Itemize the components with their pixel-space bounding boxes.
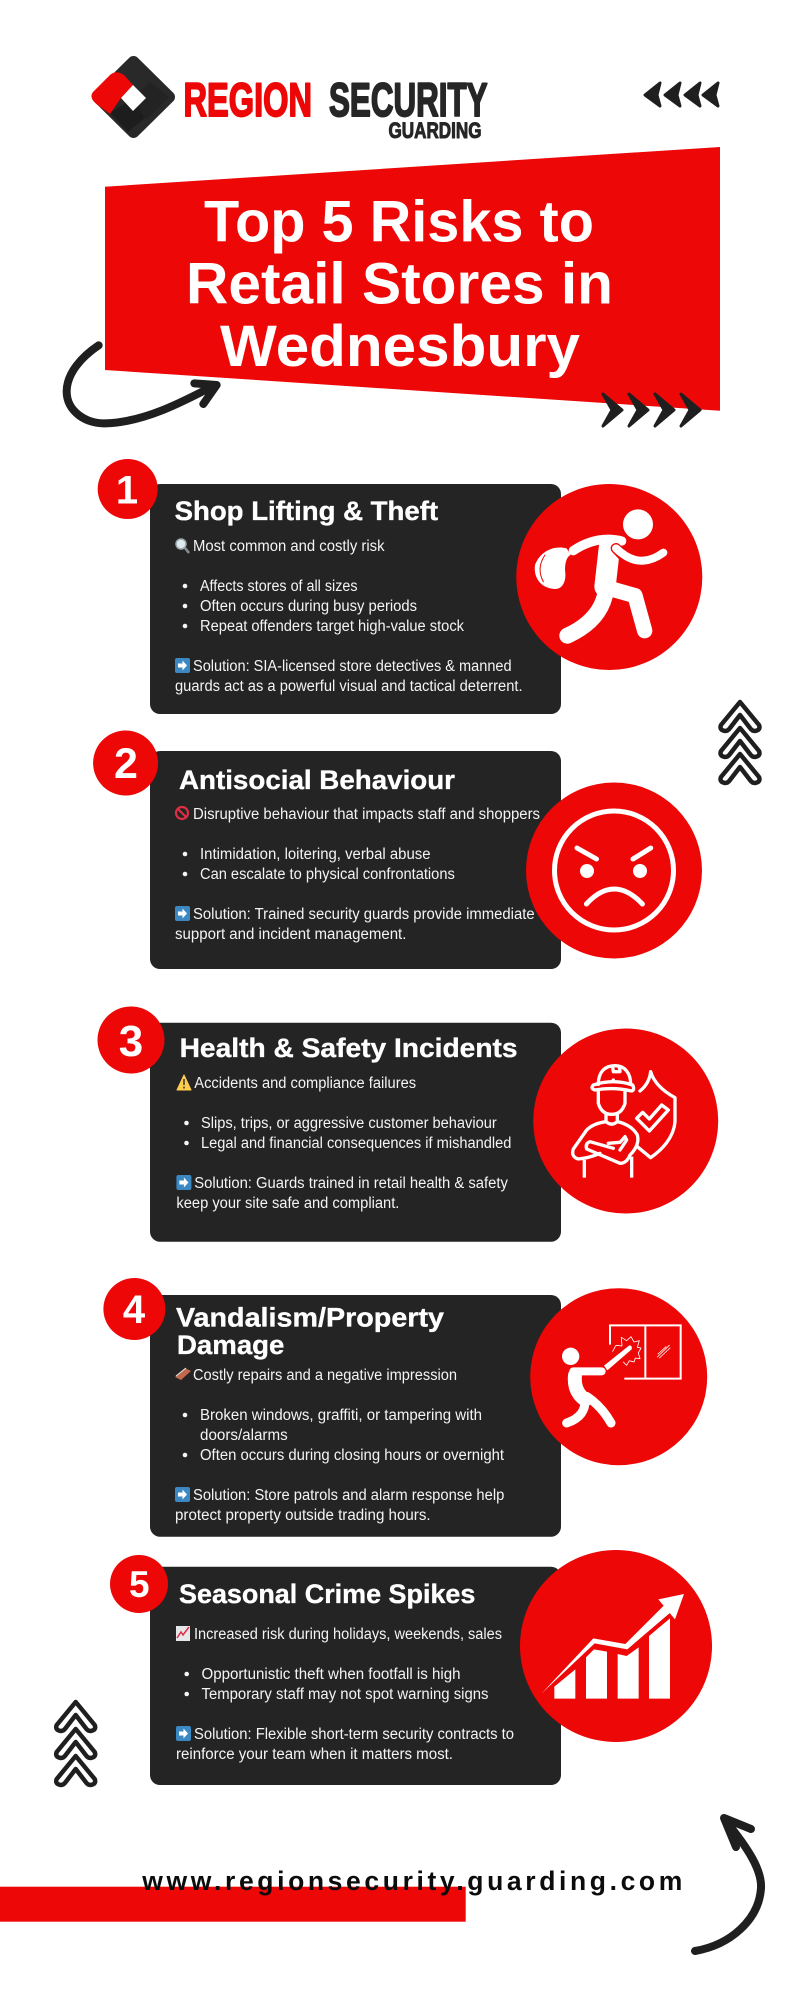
number badge 1 bbox=[98, 459, 158, 519]
up chevrons left bbox=[56, 1702, 95, 1785]
number badge 4 bbox=[103, 1278, 165, 1340]
number badge 5: 5 bbox=[129, 1564, 150, 1605]
body text: Most common and costly risk bbox=[193, 538, 385, 555]
heading: Shop Lifting & Theft bbox=[175, 496, 438, 526]
curved arrow bottom-right bbox=[695, 1818, 761, 1951]
banner shape bbox=[105, 147, 720, 411]
main title: Wednesbury bbox=[220, 314, 580, 379]
heading: Antisocial Behaviour bbox=[179, 765, 455, 795]
body text: Solution: SIA-licensed store detectives & manned bbox=[193, 658, 512, 675]
card background bbox=[150, 1567, 561, 1785]
card background bbox=[150, 484, 561, 714]
body text: Can escalate to physical confrontations bbox=[200, 866, 455, 883]
body text: Solution: Trained security guards provide immediate bbox=[193, 906, 535, 923]
panel: risk 4 bbox=[103, 1278, 707, 1537]
body text: Solution: Flexible short-term security contracts to bbox=[194, 1726, 514, 1743]
heading: Damage bbox=[177, 1330, 284, 1360]
body text: Solution: Guards trained in retail health & safety bbox=[194, 1175, 508, 1192]
logo bbox=[91, 62, 488, 143]
up chevrons right bbox=[720, 702, 760, 783]
number badge 3 bbox=[98, 1006, 164, 1074]
heading bbox=[176, 1303, 444, 1360]
body text bbox=[175, 538, 523, 695]
illustration circle: safety guard and shield bbox=[533, 1028, 718, 1214]
heading: Health & Safety Incidents bbox=[180, 1033, 518, 1063]
illustration circle: rising chart bbox=[520, 1550, 712, 1742]
number badge 4: 4 bbox=[123, 1288, 146, 1332]
logo mark bbox=[91, 62, 169, 132]
body text: Legal and financial consequences if mishandled bbox=[201, 1135, 511, 1152]
body text: guards act as a powerful visual and tactical deterrent. bbox=[175, 678, 523, 695]
panel: risk 1 bbox=[98, 459, 702, 714]
body text bbox=[176, 1075, 511, 1212]
body text: Disruptive behaviour that impacts staff and shoppers bbox=[193, 806, 540, 823]
body text: Affects stores of all sizes bbox=[200, 578, 358, 595]
panel: risk 2 bbox=[93, 730, 702, 969]
body text: Often occurs during closing hours or overnight bbox=[200, 1447, 505, 1464]
illustration circle: thief running bbox=[516, 484, 702, 670]
main title bbox=[186, 190, 613, 379]
logo wordmark: SECURITY bbox=[329, 73, 488, 126]
panel: risk 3 bbox=[98, 1006, 718, 1242]
number badge 2 bbox=[93, 730, 158, 796]
body text: Intimidation, loitering, verbal abuse bbox=[200, 846, 430, 863]
panel: risk 5 bbox=[110, 1550, 712, 1785]
body text: Slips, trips, or aggressive customer behaviour bbox=[201, 1115, 497, 1132]
body text: Repeat offenders target high-value stock bbox=[200, 618, 464, 635]
number badge 3: 3 bbox=[119, 1017, 143, 1066]
illustration circle: vandal breaking window bbox=[530, 1288, 707, 1465]
left-pointing chevrons bbox=[645, 83, 718, 106]
body text: Increased risk during holidays, weekends, sales bbox=[194, 1626, 502, 1643]
body text: Accidents and compliance failures bbox=[194, 1075, 416, 1092]
body text: Opportunistic theft when footfall is high bbox=[202, 1666, 460, 1683]
card background bbox=[150, 1295, 561, 1537]
body text: Costly repairs and a negative impression bbox=[193, 1367, 457, 1384]
main title: Top 5 Risks to bbox=[204, 190, 594, 255]
body text: protect property outside trading hours. bbox=[175, 1507, 431, 1524]
logo wordmark: GUARDING bbox=[388, 118, 482, 143]
number badge 5 bbox=[110, 1555, 168, 1613]
body text bbox=[176, 1626, 514, 1763]
body text: Temporary staff may not spot warning signs bbox=[202, 1686, 489, 1703]
body text: Often occurs during busy periods bbox=[200, 598, 417, 615]
curved arrow top-left bbox=[67, 345, 217, 423]
title banner bbox=[105, 147, 720, 411]
logo wordmark bbox=[184, 73, 488, 143]
illustration circle: angry face bbox=[526, 782, 702, 958]
website url: www.regionsecurity.guarding.com bbox=[141, 1866, 682, 1896]
number badge 2: 2 bbox=[114, 740, 138, 788]
card background bbox=[150, 1023, 561, 1242]
right-pointing chevrons bbox=[603, 394, 700, 426]
body text bbox=[175, 806, 540, 943]
logo wordmark: REGION bbox=[184, 73, 312, 126]
body text: reinforce your team when it matters most. bbox=[176, 1746, 453, 1763]
body text bbox=[175, 1367, 505, 1524]
number badge 1: 1 bbox=[116, 468, 138, 512]
footer red bar bbox=[0, 1887, 466, 1922]
heading: Seasonal Crime Spikes bbox=[179, 1579, 475, 1609]
body text: doors/alarms bbox=[200, 1427, 288, 1444]
body text: Solution: Store patrols and alarm response help bbox=[193, 1487, 504, 1504]
body text: support and incident management. bbox=[175, 926, 406, 943]
main title: Retail Stores in bbox=[186, 251, 613, 316]
card background bbox=[150, 751, 561, 969]
body text: Broken windows, graffiti, or tampering with bbox=[200, 1407, 482, 1424]
body text: keep your site safe and compliant. bbox=[176, 1195, 399, 1212]
heading: Vandalism/Property bbox=[176, 1303, 444, 1333]
